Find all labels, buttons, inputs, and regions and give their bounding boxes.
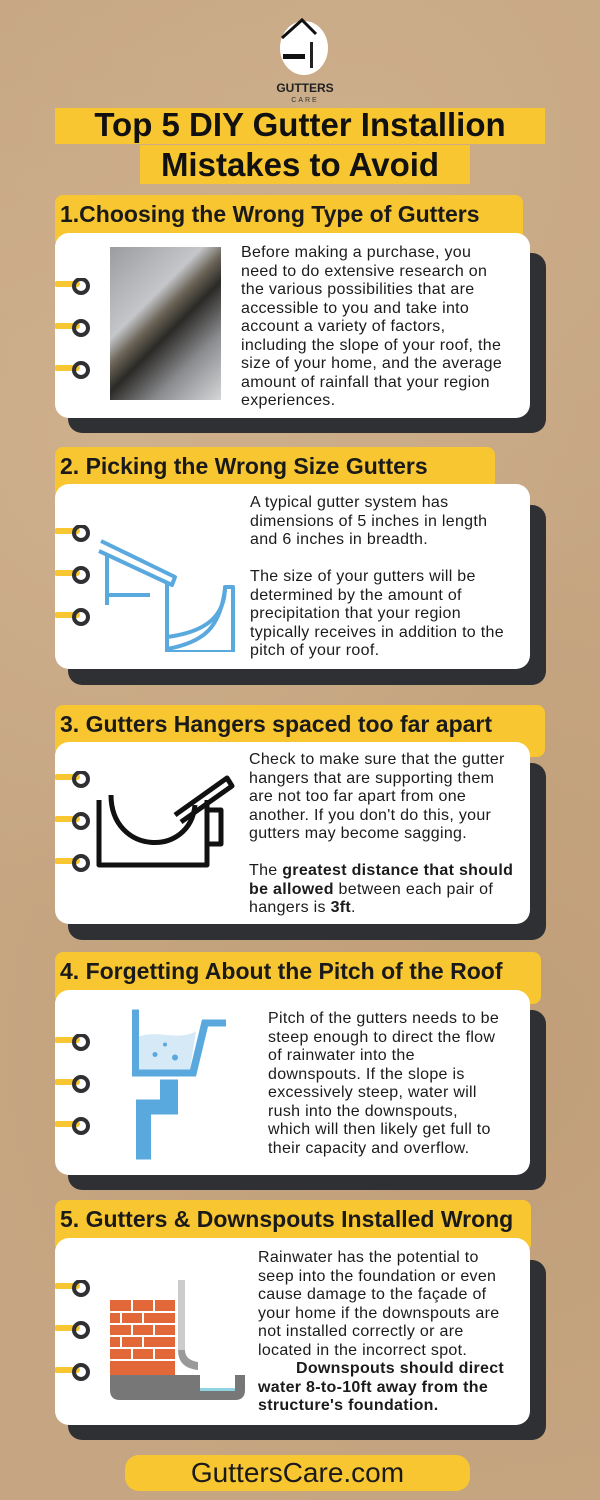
text 3: The greatest distance that should [249,862,513,879]
text 3: Check to make sure that the gutter [249,751,505,768]
text 5: structure's foundation. [258,1397,438,1414]
icon: brick wall downspout [110,1280,245,1400]
text 2: The size of your gutters will be [250,568,476,585]
icon: pitch [132,1010,226,1160]
panel: 1 [55,195,546,433]
text 1: amount of rainfall that your region [241,374,490,390]
heading 2: 2. Picking the Wrong Size Gutters [60,453,428,479]
text 3: be allowed between each pair of [249,880,493,898]
logo [276,18,334,103]
text 1: accessible to you and take into [241,300,469,316]
text 4 [268,1010,499,1156]
text 1: size of your home, and the average [241,355,502,372]
logo: GUTTERS [276,81,334,95]
panel: 2 [55,447,546,685]
icon: hanger [96,776,234,868]
photo: gutter [110,247,221,400]
footer url [125,1455,470,1491]
text 5: Downspouts should direct [296,1360,504,1377]
text 1: Before making a purchase, you [241,244,471,261]
panel: 5 [55,1200,546,1440]
text 1: experiences. [241,392,335,409]
text 4: Pitch of the gutters needs to be [268,1010,499,1027]
text 2: and 6 inches in breadth. [250,531,428,548]
text 2 [250,494,504,659]
panel: 4 [55,952,546,1190]
text 5: located in the incorrect spot. [258,1342,467,1358]
footer url: GuttersCare.com [191,1457,404,1488]
text 2: typically receives in addition to the [250,624,504,640]
panel: 3 [55,705,546,940]
text 5: water 8-to-10ft away from the [258,1378,488,1396]
text 5: not installed correctly or are [258,1323,464,1340]
text 1: the various possibilities that are [241,281,474,298]
title: Top 5 DIY Gutter Installion [94,106,506,143]
rings [55,278,90,379]
text 3: another. If you don't do this, your [249,806,491,824]
text 2: pitch of your roof. [250,642,379,659]
text 2: dimensions of 5 inches in length [250,512,487,530]
text 3 [249,751,513,916]
heading 1: 1.Choosing the Wrong Type of Gutters [60,201,480,227]
text 4: steep enough to direct the flow [268,1028,495,1046]
text 3: hangers is 3ft. [249,899,356,916]
text 4: of rainwater into the [268,1047,415,1064]
text 4: downspouts. If the slope is [268,1066,465,1082]
title [55,106,545,184]
text 5: seep into the foundation or even [258,1268,496,1284]
text 3: hangers that are supporting them [249,770,494,786]
heading 3: 3. Gutters Hangers spaced too far apart [60,711,492,737]
text 3: are not too far apart from one [249,788,466,805]
text 4: their capacity and overflow. [268,1140,469,1156]
icon: gutter size [98,539,235,652]
text 1: including the slope of your roof, the [241,336,501,354]
heading 5: 5. Gutters & Downspouts Installed Wrong [60,1206,513,1232]
title: Mistakes to Avoid [161,146,439,183]
text 5: cause damage to the façade of [258,1286,486,1303]
heading 4: 4. Forgetting About the Pitch of the Roof [60,958,502,984]
text 4: rush into the downspouts, [268,1102,458,1120]
text 1 [241,244,502,409]
text 4: which will then likely get full to [268,1121,491,1138]
text 4: excessively steep, water will [268,1084,477,1101]
text 2: precipitation that your region [250,605,461,622]
text 5: your home if the downspouts are [258,1304,499,1322]
text 5: Rainwater has the potential to [258,1249,479,1266]
text 1: need to do extensive research on [241,262,487,280]
text 2: determined by the amount of [250,586,462,604]
text 2: A typical gutter system has [250,494,448,511]
text 1: account a variety of factors, [241,318,445,335]
text 5 [258,1249,504,1414]
text 3: gutters may become sagging. [249,825,467,842]
